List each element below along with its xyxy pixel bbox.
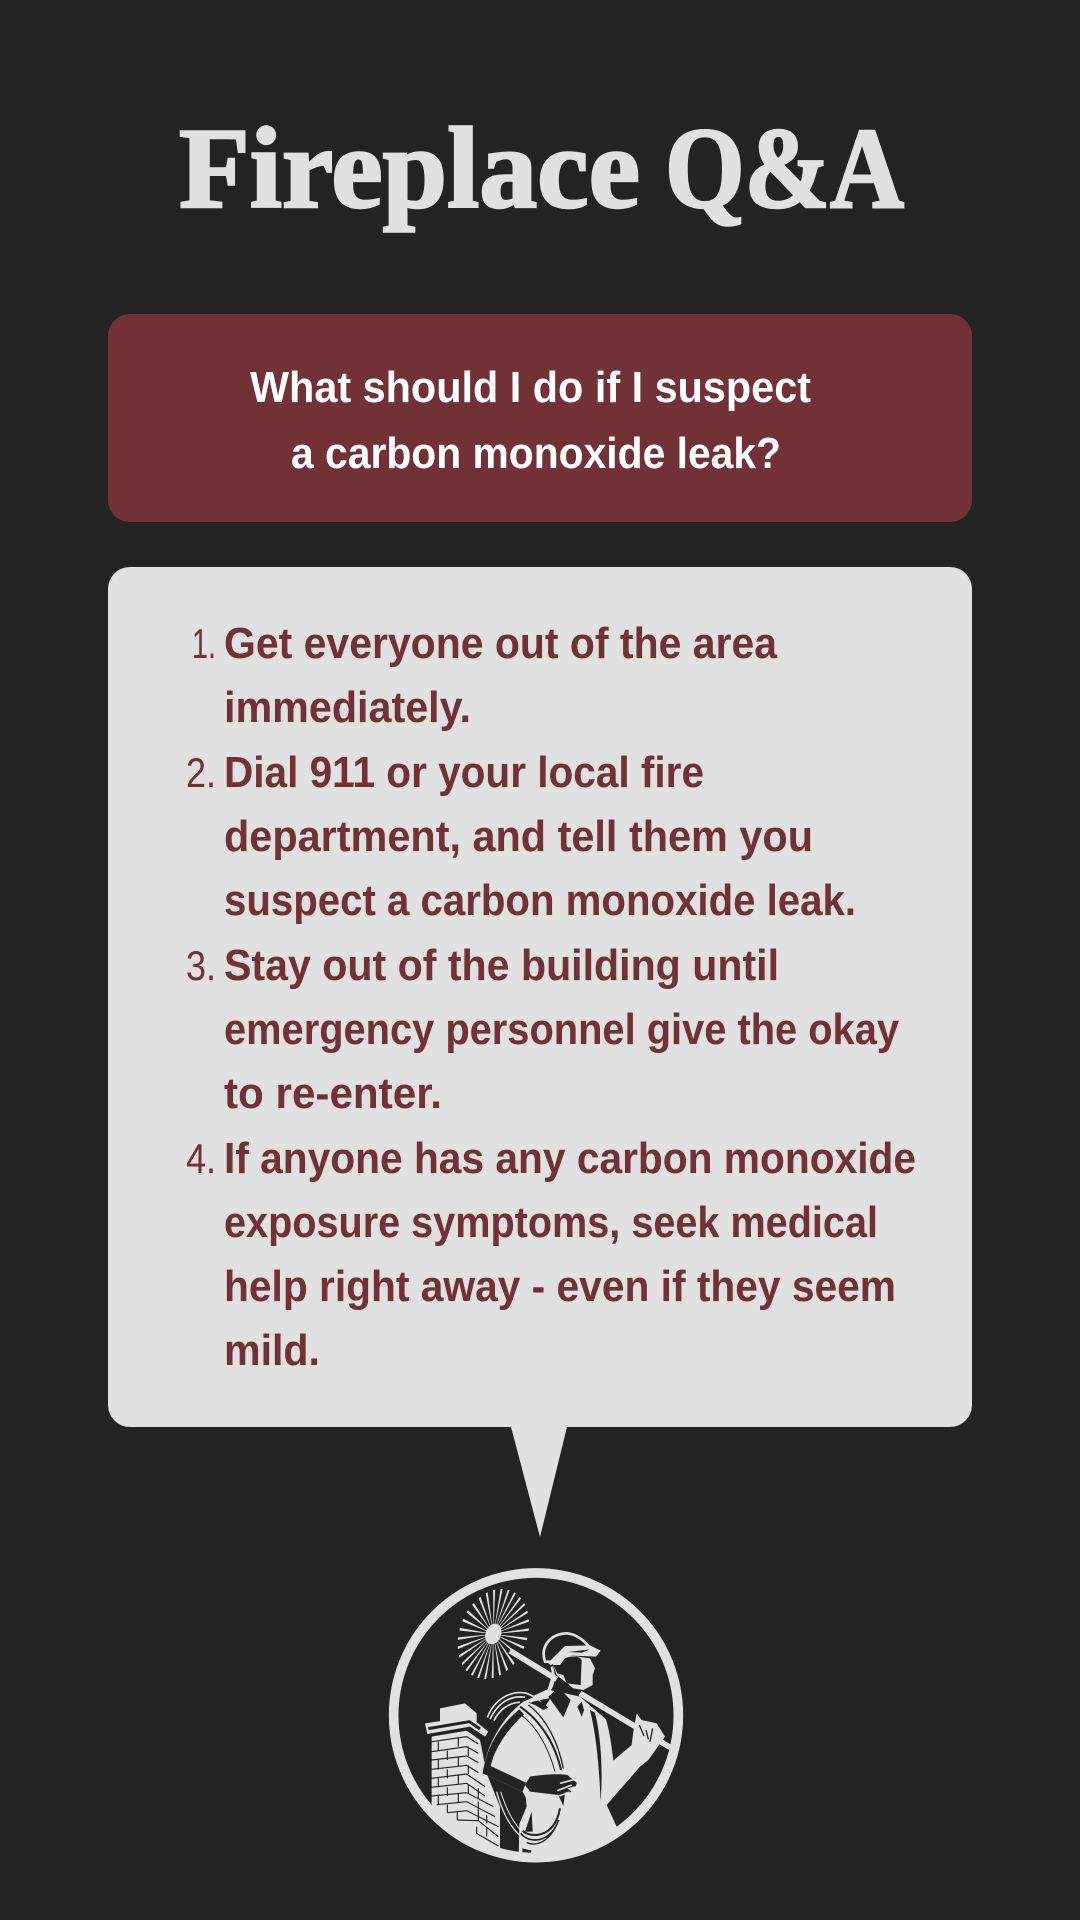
answer step 1: 1. bbox=[192, 620, 216, 667]
answer step 3: Stay out of the building until bbox=[224, 941, 779, 990]
answer step 3: to re-enter. bbox=[224, 1069, 442, 1118]
icon part: head and helmet bbox=[533, 1633, 601, 1697]
icon part: dark details bbox=[483, 1683, 602, 1854]
question text: a carbon monoxide leak? bbox=[291, 429, 781, 478]
answer step 4: help right away - even if they seem bbox=[224, 1262, 896, 1311]
icon part: gloved hand bbox=[525, 1774, 577, 1806]
answer step 1: immediately. bbox=[224, 683, 471, 732]
icon: chimney sweep logo bbox=[388, 1568, 684, 1862]
icon part: brush bbox=[469, 1606, 518, 1662]
icon part: torso and arm bbox=[484, 1690, 665, 1853]
icon part: sweep body bbox=[482, 1679, 665, 1853]
title: Q&A bbox=[665, 105, 904, 233]
answer step 3 bbox=[186, 941, 899, 1118]
answer step 2: suspect a carbon monoxide leak. bbox=[224, 876, 856, 925]
answer step 4: exposure symptoms, seek medical bbox=[224, 1198, 878, 1247]
answer step 4: If anyone has any carbon monoxide bbox=[224, 1134, 916, 1183]
question text bbox=[250, 363, 811, 478]
answer step 2 bbox=[186, 748, 856, 925]
icon part: chimney bbox=[425, 1703, 500, 1848]
panel: question bbox=[108, 314, 972, 522]
answer step 4 bbox=[186, 1134, 916, 1375]
answer step 1: Get everyone out of the area bbox=[224, 619, 777, 668]
title: Fireplace bbox=[179, 105, 640, 233]
icon part: rope loops above shoulder bbox=[487, 1693, 538, 1721]
answer step 3: emergency personnel give the okay bbox=[224, 1005, 899, 1054]
answer step 4: 4. bbox=[186, 1135, 216, 1182]
icon part: outer ring bbox=[394, 1573, 678, 1858]
answer step 2: department, and tell them you bbox=[224, 812, 813, 861]
panel: answer speech bubble bbox=[108, 567, 972, 1537]
answer step 2: Dial 911 or your local fire bbox=[224, 748, 704, 797]
answer step 2: 2. bbox=[186, 749, 216, 796]
answer step 1 bbox=[192, 619, 777, 732]
answer step 3: 3. bbox=[186, 942, 216, 989]
icon part: strap bbox=[483, 1709, 526, 1792]
title bbox=[179, 105, 904, 233]
icon part: pole bbox=[510, 1651, 670, 1747]
question text: What should I do if I suspect bbox=[250, 363, 811, 412]
answer step 4: mild. bbox=[224, 1326, 320, 1375]
